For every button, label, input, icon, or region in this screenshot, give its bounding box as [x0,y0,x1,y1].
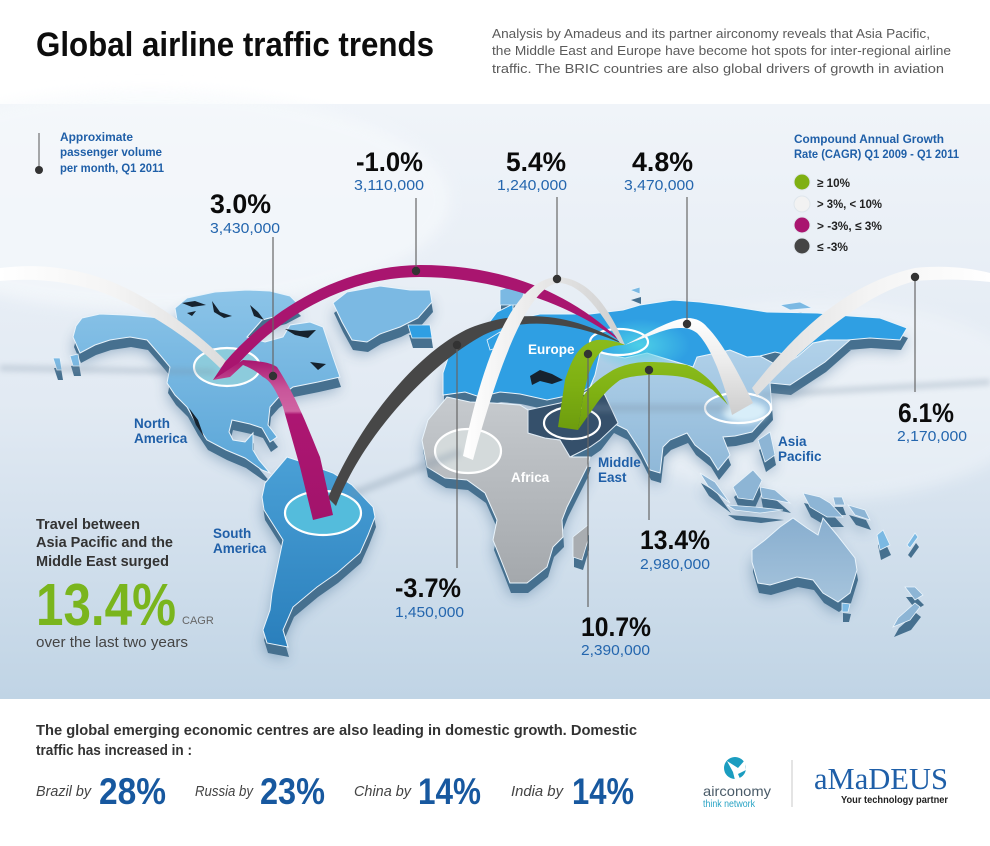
land: Europe and Russia [443,300,907,400]
glow: North America hub [194,348,260,386]
stat: Brazil: Brazil by [36,783,92,800]
land: Greenland [333,286,432,342]
arc: green Middle East to Asia Pacific [578,362,728,430]
label: Africa: Africa [511,470,550,485]
arc: white Africa to Europe [463,277,625,460]
land: Australia [752,518,857,602]
stat: 6.1% [897,398,967,445]
stat: India: 14% [572,771,634,812]
glow: Asia Pacific hub [723,401,767,423]
callout: 13.4% travel surge: 13.4% [36,572,176,638]
legend: CAGR colours [794,132,959,254]
intro text: the Middle East and Europe have become hot spots for inter-regional airline [492,43,951,58]
label: South America: America [213,541,267,556]
callout: 13.4% travel surge: Middle East surged [36,554,169,570]
stat: 5.4% [497,147,567,194]
legend: CAGR colours: Rate (CAGR) Q1 2009 - Q1 2011 [794,147,959,161]
stat: -3.7%: -3.7% [395,573,461,603]
key: passenger volume: per month, Q1 2011 [60,161,164,175]
stat: 5.4%: 5.4% [506,147,566,177]
label: Middle East: East [598,470,627,485]
arc: white Asia Pacific to the east [752,267,990,396]
callout: 13.4% travel surge: over the last two years [36,634,188,651]
land: Asia [540,340,850,473]
leader dots [269,267,919,380]
stat: 10.7%: 2,390,000 [581,642,650,659]
glow: Africa hub [435,429,501,473]
land: South America [262,457,375,647]
intro text: Analysis by Amadeus and its partner airconomy reveals that Asia Pacific, [492,26,930,41]
legend: CAGR colours: Compound Annual Growth [794,132,944,146]
stat: 4.8% [624,147,694,194]
stat: 4.8%: 3,470,000 [624,177,694,194]
arc: magenta North America to South America [213,360,333,520]
stat: 10.7% [581,612,651,659]
stat: Russia: Russia by [195,783,254,800]
stat: Brazil [36,771,166,812]
logo: Amadeus: Your technology partner [841,794,948,806]
logo: airconomy: airconomy [703,783,771,799]
text: domestic growth intro [36,722,637,759]
world map [53,285,924,659]
stat: -3.7% [395,573,464,621]
stat: China [354,771,481,812]
stat: 10.7%: 10.7% [581,612,651,642]
stat: India: India by [511,783,564,800]
stat: 6.1%: 2,170,000 [897,428,967,445]
stat: China: 14% [418,771,481,812]
stat: 4.8%: 4.8% [632,147,693,177]
label: Europe: Europe [528,342,575,357]
stat: 13.4%: 13.4% [640,525,710,555]
stat: 3.0% [210,189,280,237]
callout: 13.4% travel surge: Asia Pacific and the [36,535,173,551]
details: inland seas and arctic channels [182,301,563,437]
title: Global airline traffic trends [36,26,434,64]
stat: Russia: 23% [260,771,325,812]
glow: South America hub [285,491,361,535]
legend: CAGR colours: > 3%, < 10% [817,197,882,211]
key: passenger volume: passenger volume [60,145,162,159]
text: domestic growth intro: The global emerging economic centres are also leading in domestic growth. Domestic [36,722,637,739]
arc: magenta North America to Europe [213,265,625,380]
logo: airconomy: think network [703,799,756,810]
leader lines [273,197,915,607]
callout: 13.4% travel surge [36,517,214,651]
logo: airconomy [703,757,771,810]
land: Africa [422,397,590,583]
stat: -1.0%: -1.0% [356,147,423,177]
stat: 3.0%: 3,430,000 [210,220,280,237]
stat: 13.4%: 2,980,000 [640,556,710,573]
stat: -3.7%: 1,450,000 [395,604,464,621]
callout: 13.4% travel surge: CAGR [182,615,214,627]
label: South America: South [213,526,251,541]
stat: -1.0%: 3,110,000 [354,177,424,194]
land: islands [53,285,923,627]
label: North America: America [134,431,188,446]
panel: world map background [0,90,990,699]
glow: Europe hub [590,319,690,371]
stat: India [511,771,634,812]
stat: 6.1%: 6.1% [898,398,954,428]
stat: China: China by [354,783,412,800]
intro text: traffic. The BRIC countries are also global drivers of growth in aviation [492,61,944,76]
arc shadows [0,368,990,495]
stat: 3.0%: 3.0% [210,189,271,219]
key: passenger volume: Approximate [60,130,133,144]
stat: 13.4% [640,525,710,573]
arc: green Middle East to Europe [558,340,625,430]
divider [791,760,793,807]
arc: dark grey South America to Europe [328,316,625,506]
arc: white Asia Pacific to Europe [625,318,753,415]
legend: CAGR colours: ≥ 10% [817,176,850,190]
key: passenger volume [35,130,164,175]
label: Asia Pacific: Pacific [778,449,822,464]
arc: white from west into North America [0,266,227,368]
intro text [492,26,951,76]
stat: 5.4%: 1,240,000 [497,177,567,194]
hub rings [194,329,771,535]
label: Middle East: Middle [598,455,641,470]
land: North America [73,290,340,473]
logo: Amadeus: aMaDEUS [814,761,948,796]
legend: CAGR colours: > -3%, ≤ 3% [817,219,882,233]
legend: CAGR colours: ≤ -3% [817,240,848,254]
label: Asia Pacific: Asia [778,434,807,449]
callout: 13.4% travel surge: Travel between [36,517,140,533]
label: North America: North [134,416,170,431]
land: Middle East [528,385,618,457]
stat: -1.0% [354,147,424,194]
stat: Brazil: 28% [99,771,166,812]
text: domestic growth intro: traffic has increased in : [36,742,192,759]
stat: Russia [195,771,325,812]
